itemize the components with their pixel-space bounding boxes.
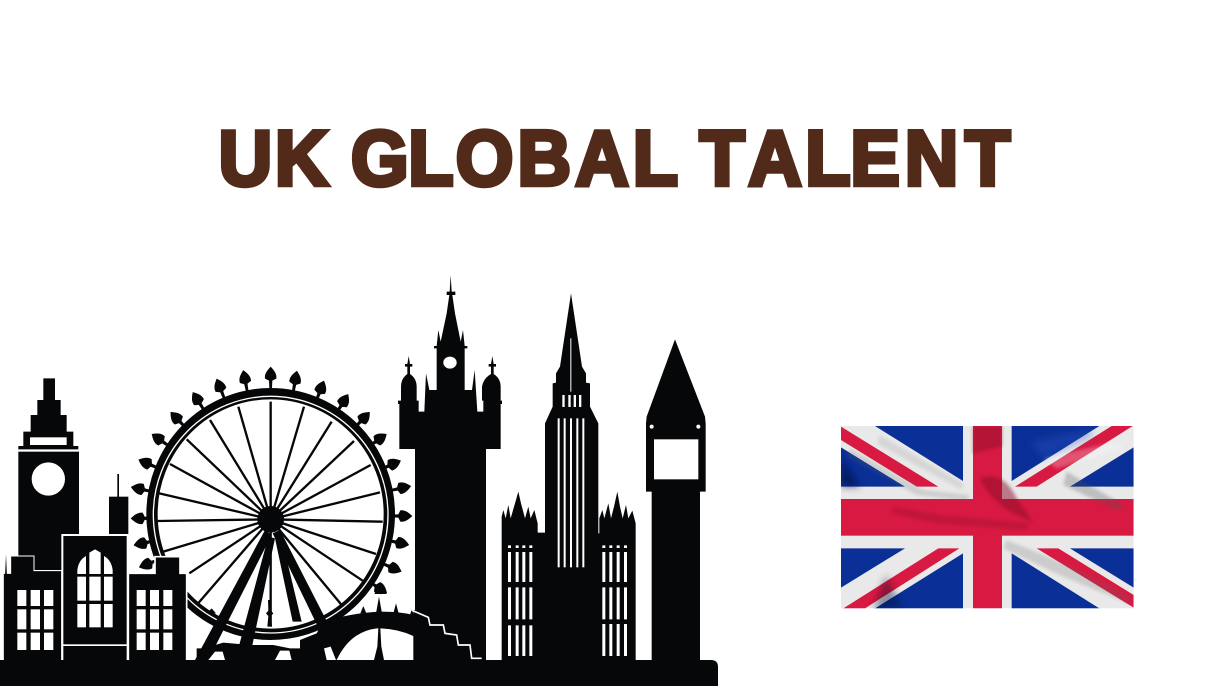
icon: stepped white outline on gear bbox=[412, 610, 482, 658]
title: UK GLOBAL TALENT bbox=[219, 115, 1010, 202]
icon: wheel support legs and gear base bbox=[195, 530, 417, 660]
fabric fold shading bbox=[841, 426, 1130, 608]
icon: left clock tower and buildings bbox=[3, 378, 187, 663]
icon: windows bbox=[17, 549, 172, 650]
icon: pointed roof tower bbox=[646, 339, 706, 660]
icon: UK flag bbox=[841, 426, 1134, 608]
icon: ornate spired tower bbox=[398, 275, 502, 660]
London skyline silhouette bbox=[0, 275, 718, 686]
icon: central gothic tower with wings bbox=[502, 293, 636, 660]
ground strip bbox=[0, 660, 718, 686]
icon: ferris wheel bbox=[130, 367, 412, 634]
